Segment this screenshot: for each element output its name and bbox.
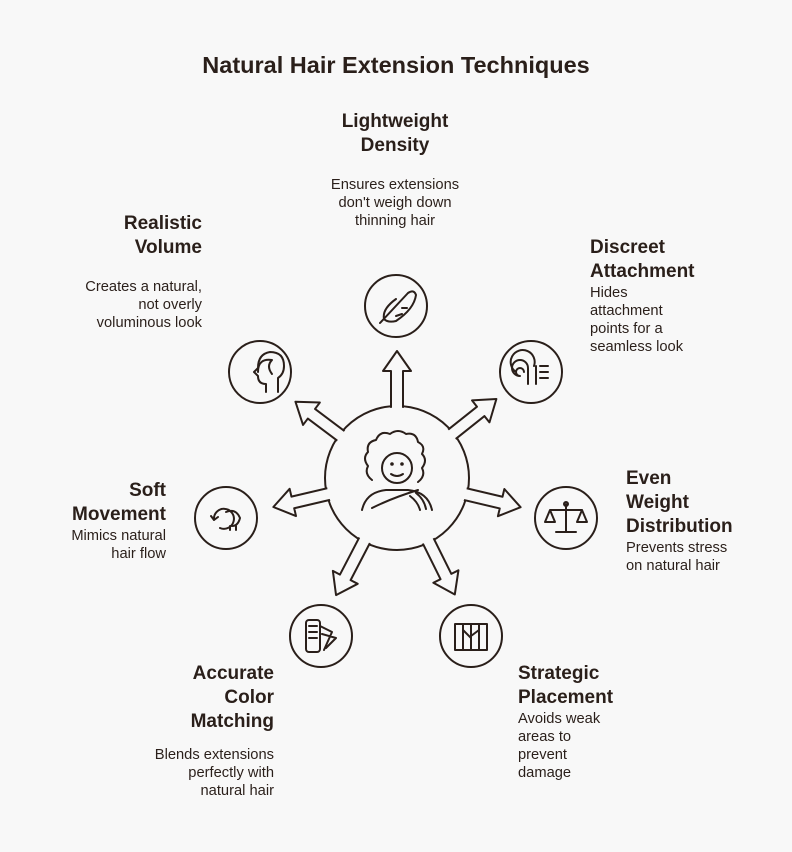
text: Even Weight Distribution: Even	[626, 468, 671, 489]
text: Even Weight Distribution: Prevents stress	[626, 540, 727, 556]
text: Strategic Placement: Placement	[518, 687, 613, 708]
icon: attachment	[511, 350, 548, 384]
text: Realistic Volume	[85, 213, 202, 331]
text: Soft Movement: Mimics natural	[71, 528, 166, 544]
text: Realistic Volume: Volume	[135, 237, 202, 258]
text: Even Weight Distribution: on natural hair	[626, 558, 720, 574]
text: Even Weight Distribution	[626, 468, 733, 574]
text: Lightweight Density: don't weigh down	[338, 195, 452, 211]
text: Realistic Volume: Realistic	[124, 213, 202, 234]
text: Lightweight Density: Density	[361, 135, 429, 156]
text: Soft Movement: hair flow	[111, 546, 166, 562]
text: Lightweight Density: Ensures extensions	[331, 177, 459, 193]
text: Strategic Placement: Strategic	[518, 663, 599, 684]
text: Realistic Volume: not overly	[138, 297, 202, 313]
text: Strategic Placement: Avoids weak	[518, 711, 600, 727]
text: Accurate Color Matching: Color	[224, 687, 274, 708]
text: Realistic Volume: voluminous look	[97, 315, 202, 331]
text: Accurate Color Matching: natural hair	[201, 783, 274, 799]
text: Strategic Placement	[518, 663, 613, 781]
text: Discreet Attachment	[590, 237, 695, 355]
text: Accurate Color Matching	[155, 663, 274, 799]
icon: placement	[455, 624, 487, 650]
hub circle	[325, 406, 469, 550]
text: Strategic Placement: areas to	[518, 729, 571, 745]
text: Accurate Color Matching: Matching	[191, 711, 274, 732]
text: Accurate Color Matching: perfectly with	[188, 765, 274, 781]
text: Accurate Color Matching: Accurate	[193, 663, 274, 684]
text: Lightweight Density: thinning hair	[355, 213, 435, 229]
icon: scale	[545, 502, 587, 532]
text: Strategic Placement: damage	[518, 765, 571, 781]
icon: feather	[380, 291, 416, 323]
text: Discreet Attachment: points for a	[590, 321, 663, 337]
text: Discreet Attachment: Discreet	[590, 237, 665, 258]
icon: color swatch	[306, 620, 336, 652]
text: Soft Movement: Soft	[129, 480, 166, 501]
text: Strategic Placement: prevent	[518, 747, 567, 763]
text: Discreet Attachment: Attachment	[590, 261, 695, 282]
text: Discreet Attachment: attachment	[590, 303, 663, 319]
arrows	[270, 351, 524, 602]
text: Soft Movement: Movement	[72, 504, 166, 525]
text: Even Weight Distribution: Distribution	[626, 516, 733, 537]
text: Realistic Volume: Creates a natural,	[85, 279, 202, 295]
icon: woman with curly hair	[362, 431, 432, 510]
text: Accurate Color Matching: Blends extensions	[155, 747, 274, 763]
text: Lightweight Density	[331, 111, 459, 229]
title: Natural Hair Extension Techniques	[202, 52, 590, 78]
icon circles	[195, 275, 597, 667]
text: Lightweight Density: Lightweight	[342, 111, 448, 132]
text: Discreet Attachment: seamless look	[590, 339, 683, 355]
icon: head profile	[254, 352, 284, 392]
text: Even Weight Distribution: Weight	[626, 492, 689, 513]
icon: movement	[211, 509, 240, 530]
text: Discreet Attachment: Hides	[590, 285, 628, 301]
text: Soft Movement	[71, 480, 166, 562]
